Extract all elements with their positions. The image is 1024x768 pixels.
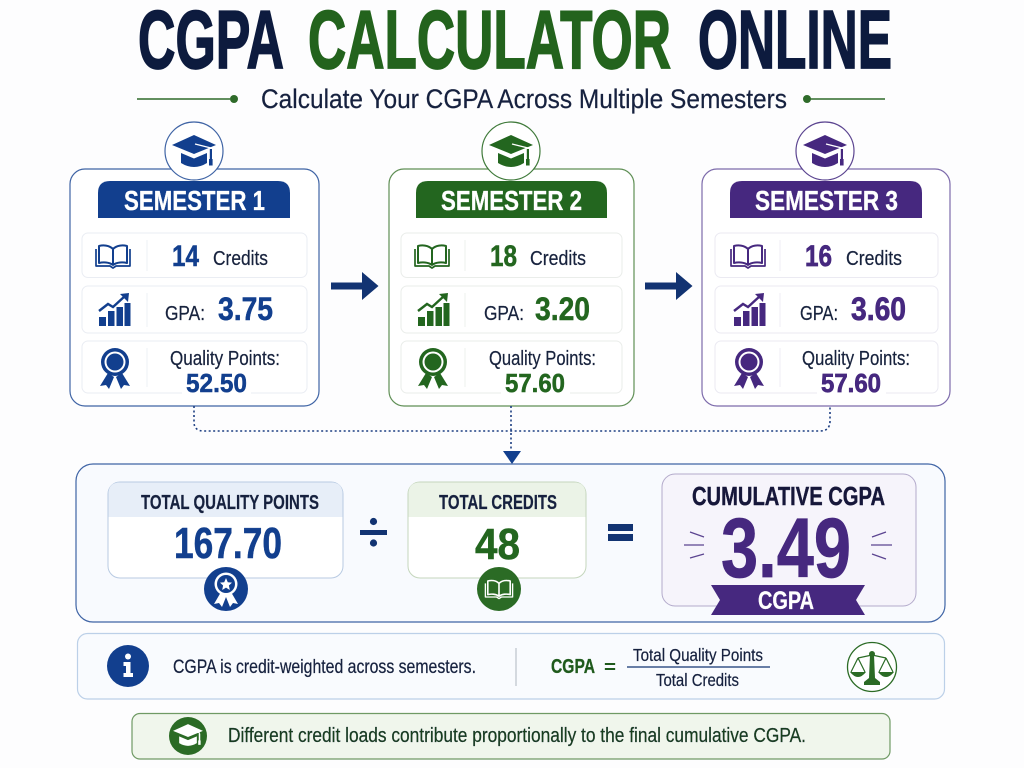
gpa row 1: 3.75 [218, 291, 273, 327]
gpa row 2 [401, 286, 622, 333]
heading: semester 1 [98, 181, 290, 218]
heading: semester 2: SEMESTER 2 [441, 185, 582, 216]
icon: graduation cap 1 [165, 122, 223, 180]
arrow: semester 2 to 3 [645, 272, 692, 300]
quality points row 3 [715, 341, 938, 398]
icon: scales [848, 642, 896, 692]
gpa row 1: GPA: [165, 303, 205, 325]
box: cumulative cgpa: 3.49 [721, 501, 851, 595]
credits row 3: 16 [805, 240, 832, 273]
icon: graduation cap 3 [796, 122, 854, 180]
formula: Total Quality Points [633, 645, 763, 665]
quality points row 1: 52.50 [186, 368, 247, 398]
panel: semester 2 [389, 122, 634, 406]
credits row 3 [715, 233, 938, 278]
box: cumulative cgpa: CUMULATIVE CGPA [692, 481, 885, 511]
panel: calculation [76, 464, 945, 622]
formula [551, 645, 770, 690]
heading: semester 3: SEMESTER 3 [755, 185, 898, 216]
credits row 1: 14 [172, 240, 199, 273]
quality points row 2: 57.60 [505, 368, 565, 398]
gpa row 1 [82, 286, 307, 333]
panel: info and formula [78, 634, 944, 699]
credits row 2: Credits [530, 248, 586, 270]
rays [684, 532, 892, 559]
icon: graduation cap 2 [482, 122, 540, 180]
callout: credit loads [132, 714, 890, 759]
icon: award badge [204, 567, 248, 611]
icon: book badge [477, 567, 521, 611]
subtitle: Calculate Your CGPA Across Multiple Semesters [261, 84, 787, 114]
gpa row 3 [715, 286, 938, 333]
quality points row 1: Quality Points: [170, 348, 280, 370]
icon: info [107, 645, 149, 687]
formula: CGPA [551, 656, 595, 678]
formula: Total Credits [656, 670, 739, 690]
credits row 1: Credits [213, 248, 268, 270]
gpa row 2: GPA: [484, 303, 524, 325]
quality points row 3: Quality Points: [802, 348, 910, 370]
icon: green cap [169, 717, 207, 755]
ribbon: cgpa [711, 585, 865, 615]
quality points row 1 [82, 341, 307, 398]
arrow: semester 1 to 2 [331, 272, 378, 300]
box: total credits [408, 482, 586, 578]
panel: semester 1 [70, 122, 319, 406]
gpa row 2: 3.20 [535, 291, 590, 327]
credits row 3: Credits [846, 248, 902, 270]
ribbon: cgpa: CGPA [758, 587, 814, 615]
quality points row 2 [401, 341, 622, 398]
credits row 1 [82, 233, 307, 278]
credits row 2: 18 [490, 240, 517, 273]
box: total quality points: TOTAL QUALITY POINTS [141, 492, 319, 514]
text: credit weighted note: CGPA is credit-weighted across semesters. [173, 657, 476, 678]
heading: semester 1: SEMESTER 1 [124, 185, 265, 216]
dotted connector arrows [194, 406, 830, 464]
formula: = [604, 657, 616, 677]
box: total quality points [108, 482, 343, 578]
operator: divide [360, 518, 387, 547]
gpa row 3: 3.60 [851, 291, 906, 327]
credits row 2 [401, 233, 622, 278]
box: total credits: TOTAL CREDITS [439, 492, 557, 514]
quality points row 3: 57.60 [821, 368, 881, 398]
gpa row 3: GPA: [800, 303, 838, 325]
quality points row 2: Quality Points: [489, 348, 596, 370]
operator: equals [608, 524, 633, 541]
box: cumulative cgpa [662, 474, 916, 615]
callout: credit loads: Different credit loads contribute proportionally to the final cumulative CGPA. [228, 725, 806, 747]
heading: semester 3 [730, 181, 922, 218]
heading: semester 2 [416, 181, 607, 218]
panel: semester 3 [702, 122, 950, 406]
box: total quality points: 167.70 [174, 519, 282, 568]
box: total credits: 48 [475, 520, 520, 569]
